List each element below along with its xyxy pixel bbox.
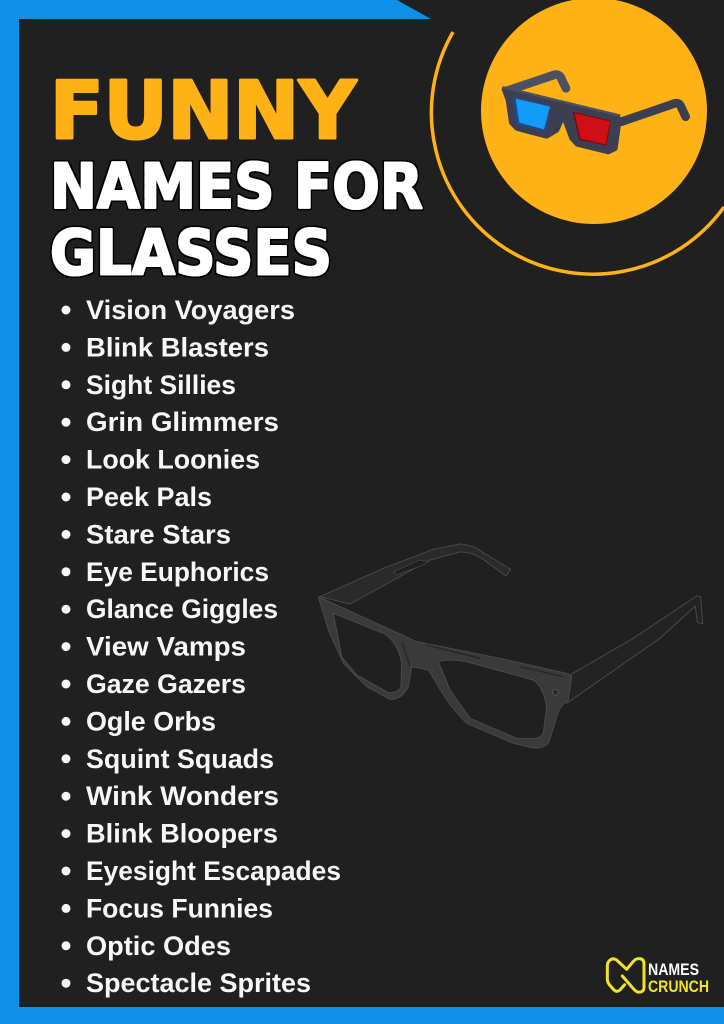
bulleted name list: Eyesight Escapades: [86, 856, 341, 886]
bulleted name list: Ogle Orbs: [86, 706, 216, 736]
title: NAMES FOR: NAMES FOR: [50, 150, 423, 223]
bulleted name list: Look Loonies: [86, 445, 260, 475]
bulleted name list: Eye Euphorics: [86, 557, 269, 587]
bulleted name list: Optic Odes: [86, 931, 231, 961]
title: GLASSES: GLASSES: [50, 216, 332, 290]
logo: Names Crunch: [607, 959, 709, 996]
icon: 3D glasses: [503, 75, 686, 152]
bulleted name list: Gaze Gazers: [86, 669, 246, 699]
bulleted name list: Stare Stars: [86, 519, 231, 549]
bulleted name list: [62, 295, 341, 998]
bulleted name list: Squint Squads: [86, 744, 274, 774]
icon: orange circle: [481, 0, 707, 224]
orange ring arc: [431, 32, 724, 274]
title: FUNNY: FUNNY: [50, 65, 357, 157]
bulleted name list: Sight Sillies: [86, 370, 236, 400]
icon: logo N mark: [607, 959, 644, 992]
panel: decorative ghost glasses: [318, 544, 703, 748]
bulleted name list: Blink Blasters: [86, 332, 269, 362]
logo text: CRUNCH: CRUNCH: [648, 977, 709, 996]
bulleted name list: View Vamps: [86, 632, 246, 662]
bulleted name list: Blink Bloopers: [86, 819, 278, 849]
bulleted name list: Glance Giggles: [86, 594, 278, 624]
bulleted name list: Wink Wonders: [86, 781, 279, 811]
bulleted name list: Peek Pals: [86, 482, 212, 512]
bulleted name list: Focus Funnies: [86, 893, 273, 923]
bulleted name list: Vision Voyagers: [86, 295, 295, 325]
title: [50, 65, 423, 290]
bulleted name list: Spectacle Sprites: [86, 968, 311, 998]
logo text: NAMES: NAMES: [648, 960, 699, 979]
bulleted name list: Grin Glimmers: [86, 407, 279, 437]
